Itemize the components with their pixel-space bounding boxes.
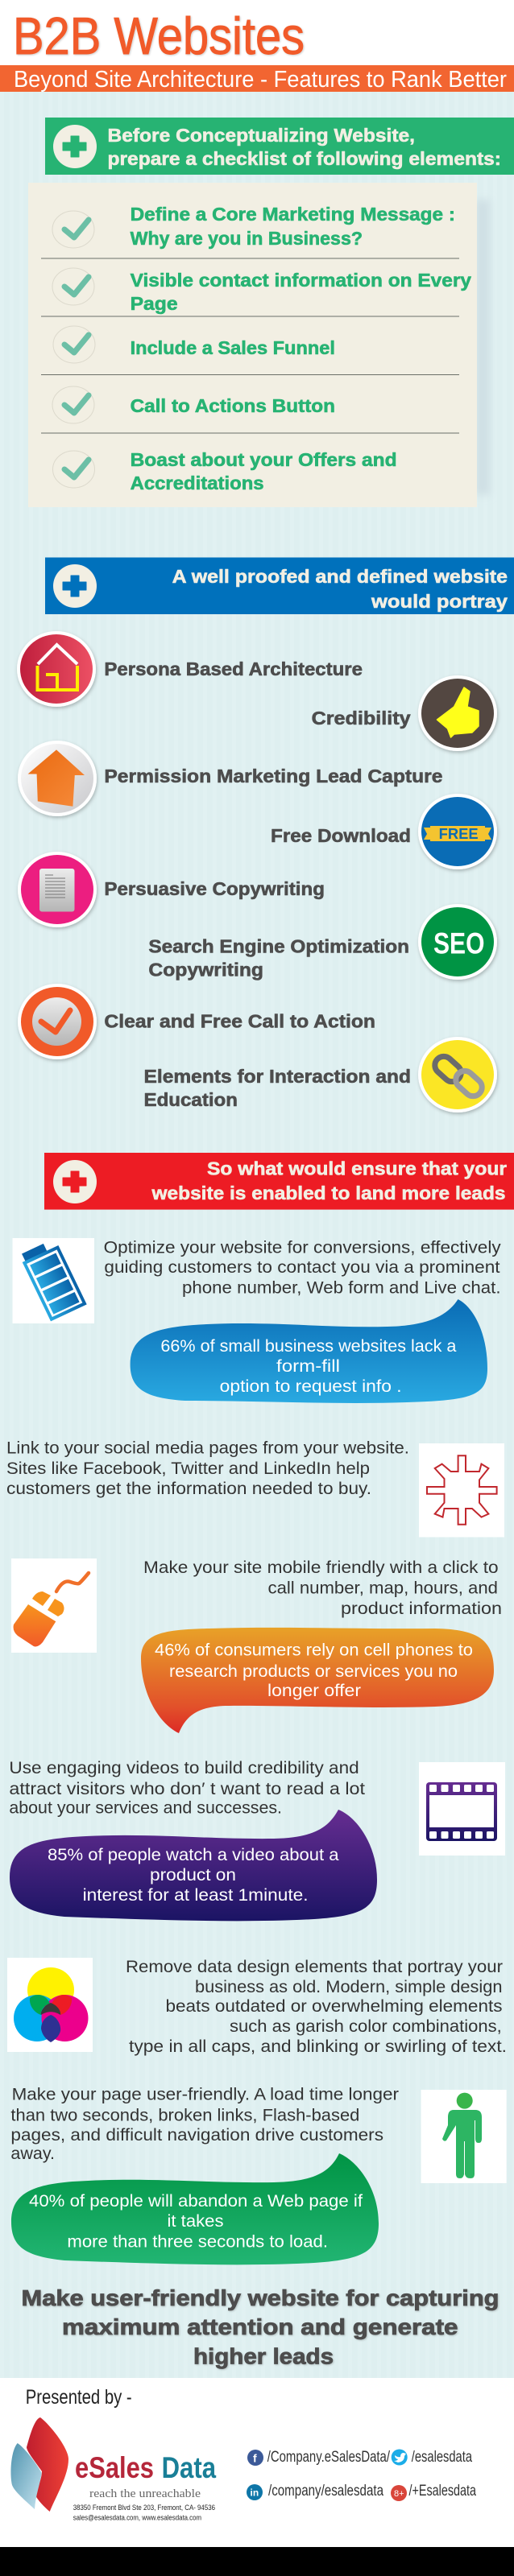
feature: search engine optimization: Search Engine Optimization [148, 935, 409, 956]
callout: 66%: option to request info . [220, 1377, 402, 1396]
checklist text: Page [131, 293, 178, 314]
callout: 40%: it takes [168, 2212, 224, 2231]
banner: checklist heading [45, 118, 514, 175]
callout: 85% [10, 1810, 377, 1921]
text: mobile: call number, map, hours, and [267, 1579, 498, 1597]
text: user friendly [10, 2085, 399, 2163]
feature: interaction and education [143, 1066, 411, 1110]
checklist text: Accreditations [131, 473, 264, 493]
social: linkedin [247, 2483, 383, 2500]
feature: persona: Persona Based Architecture [104, 658, 363, 679]
icon: document [18, 852, 97, 927]
feature: search engine optimization [148, 935, 409, 980]
callout: 85%: interest for at least 1minute. [83, 1886, 309, 1905]
social: twitter [392, 2449, 472, 2466]
text: design: beats outdated or overwhelming elements [166, 1997, 503, 2016]
callout: 66%: 66% of small business websites lack a [160, 1337, 457, 1356]
icon: colour circles [7, 1958, 93, 2052]
logo: eSales Data: reach the unreachable [89, 2487, 201, 2500]
banner: website portrait heading [45, 557, 514, 614]
closing statement: Make user-friendly website for capturing [21, 2285, 499, 2310]
text: social: customers get the information needed to buy. [6, 1480, 371, 1498]
check marks [52, 211, 95, 488]
text: user friendly: Make your page user-friendly. A load time longer [12, 2085, 399, 2104]
checklist text: Call to Actions Button [131, 395, 335, 416]
checklist text: Visible contact information on Every [131, 270, 471, 291]
icon: chain links [418, 1037, 497, 1113]
text: user friendly: than two seconds, broken links, Flash-based [10, 2107, 359, 2125]
text: mobile [143, 1558, 502, 1618]
social: twitter: /esalesdata [412, 2449, 472, 2466]
closing statement [21, 2285, 499, 2369]
checklist text: Define a Core Marketing Message : [131, 204, 455, 225]
banner: website portrait heading: would portray [371, 591, 508, 612]
callout: 40%: more than three seconds to load. [67, 2233, 328, 2251]
title: B2B Websites [13, 6, 305, 65]
text: optimize: Optimize your website for conversions, effectively [104, 1238, 501, 1257]
text: optimize [104, 1238, 501, 1298]
feature: permission marketing: Permission Marketing Lead Capture [104, 766, 442, 786]
social: google plus: 8+ [394, 2489, 404, 2499]
callout: 85%: product on [150, 1866, 236, 1885]
banner: checklist heading: prepare a checklist of following elements: [108, 148, 501, 169]
closing statement: maximum attention and generate [62, 2314, 458, 2339]
text: social: Sites like Facebook, Twitter and LinkedIn help [6, 1459, 370, 1478]
icon: SEO [418, 904, 497, 980]
social: facebook: /Company.eSalesData/ [267, 2449, 391, 2466]
callout: 66%: form-fill [276, 1357, 340, 1376]
icon: orange home arrow [18, 741, 97, 816]
callout: 40% [11, 2153, 379, 2264]
icon: film strip [419, 1762, 505, 1856]
text: user friendly: away. [10, 2145, 55, 2163]
text: design [126, 1958, 507, 2056]
text: videos: Use engaging videos to build credibility and [9, 1759, 359, 1777]
text: mobile: Make your site mobile friendly with a click to [143, 1558, 499, 1577]
banner: leads heading: website is enabled to land more leads [151, 1183, 506, 1203]
logo: eSales Data: 38350 Fremont Blvd Ste 203, Fremont, CA- 94536 [73, 2504, 215, 2512]
logo: eSales Data: Data [162, 2451, 216, 2484]
footer label: Presented by - [26, 2386, 132, 2409]
icon: person [421, 2090, 507, 2183]
feature: call to action: Clear and Free Call to Action [104, 1011, 375, 1032]
feature: free download: Free Download [271, 825, 411, 846]
logo: eSales Data [10, 2417, 216, 2522]
feature: interaction and education: Elements for Interaction and [143, 1066, 411, 1087]
feature: persuasive copywriting: Persuasive Copywriting [104, 878, 325, 899]
icon: free ribbon [418, 794, 497, 869]
callout: 46%: 46% of consumers rely on cell phones to [155, 1641, 473, 1660]
icon: house [17, 631, 96, 707]
social: linkedin: /company/esalesdata [268, 2483, 383, 2500]
checklist text [131, 204, 471, 493]
social: linkedin: in [250, 2487, 259, 2499]
social: facebook [247, 2449, 391, 2466]
text: user friendly: pages, and difficult navigation drive customers [10, 2126, 383, 2145]
checklist text: Include a Sales Funnel [131, 337, 335, 358]
text: social: Link to your social media pages from your website. [6, 1439, 409, 1457]
feature: credibility: Credibility [312, 708, 411, 729]
checklist dividers [41, 258, 459, 433]
feature: search engine optimization: Copywriting [148, 960, 263, 980]
text: videos: attract visitors who don′ t want to read a lot [9, 1780, 365, 1798]
closing statement: higher leads [193, 2344, 334, 2369]
icon: network gear [419, 1443, 504, 1538]
logo: eSales Data: eSales [75, 2451, 154, 2484]
checklist text: Boast about your Offers and [131, 449, 397, 470]
callout: 46%: longer offer [267, 1682, 361, 1700]
text: videos [9, 1759, 365, 1818]
text: design: Remove data design elements that portray your [126, 1958, 503, 1976]
text: optimize: guiding customers to contact you via a prominent [104, 1258, 500, 1277]
callout: 46%: research products or services you no [169, 1662, 458, 1681]
banner: checklist heading: Before Conceptualizing Website, [108, 125, 415, 146]
banner: website portrait heading: A well proofed and defined website [172, 566, 508, 587]
callout: 46% [141, 1628, 494, 1733]
social: google plus: /+Esalesdata [409, 2483, 476, 2500]
text: mobile: product information [341, 1600, 502, 1618]
icon: check badge [18, 984, 97, 1059]
banner: leads heading [44, 1153, 514, 1210]
text: optimize: phone number, Web form and Live chat. [182, 1279, 501, 1298]
text: design: such as garish color combinations, [230, 2017, 502, 2036]
callout: 85%: 85% of people watch a video about a [48, 1846, 339, 1864]
callout: 40%: 40% of people will abandon a Web page if [29, 2192, 363, 2211]
text: videos: about your services and successes. [9, 1798, 282, 1818]
icon: thumbs up [418, 675, 497, 751]
checklist text: Why are you in Business? [131, 228, 363, 249]
banner: leads heading: So what would ensure that your [207, 1158, 507, 1179]
logo: eSales Data: sales@esalesdata.com, www.esalesdata.com [73, 2513, 201, 2522]
icon: battery [13, 1238, 94, 1323]
feature: interaction and education: Education [143, 1089, 238, 1110]
text: social [6, 1439, 409, 1498]
icon: SEO: SEO [433, 927, 485, 960]
callout: 66% [131, 1299, 487, 1403]
social: google plus [391, 2483, 476, 2501]
panel: checklist [28, 183, 490, 507]
social: facebook: f [253, 2452, 257, 2465]
icon: free ribbon: FREE [439, 826, 479, 842]
text: design: business as old. Modern, simple design [195, 1978, 503, 1996]
text: design: type in all caps, and blinking or swirling of text. [129, 2037, 507, 2056]
icon: mouse [11, 1558, 97, 1653]
